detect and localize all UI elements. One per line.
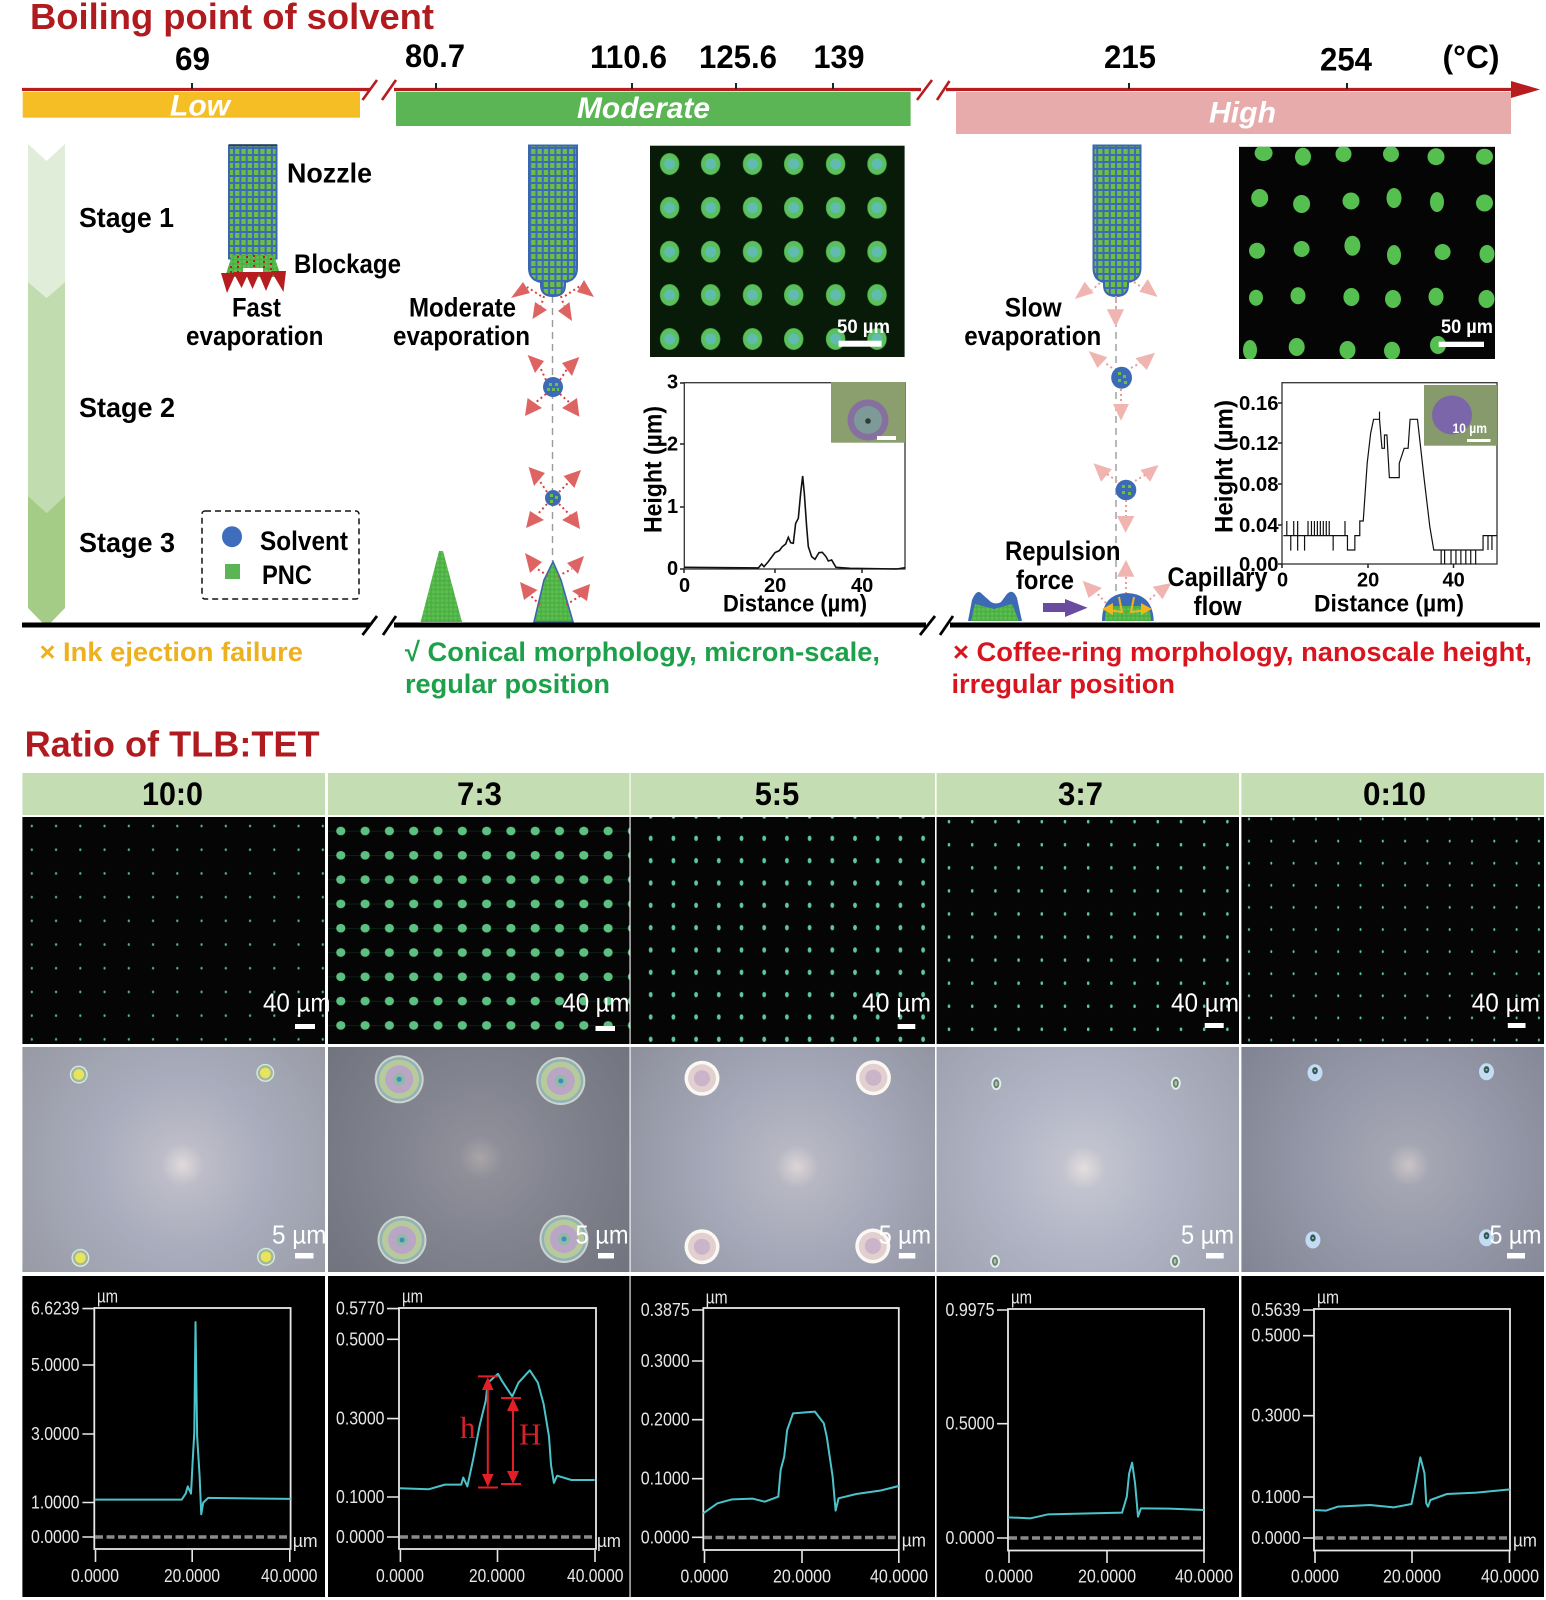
profile chart: 0:10: 0.0000: [1291, 1566, 1339, 1587]
scale labels: 5 µm: 5 µm: [272, 1220, 326, 1250]
nozzle: high: [1094, 146, 1140, 296]
ink ejection: high column: [968, 146, 1171, 621]
inset: optical micrograph: 10 µm: [1452, 421, 1487, 436]
profile chart: 10:0: [22, 1276, 325, 1597]
band: moderate: Moderate: [577, 92, 710, 125]
profile chart: 10:0: µm: [293, 1530, 318, 1551]
labels: nozzle and blockage: Nozzle: [287, 158, 372, 188]
outcome: high: irregular position: [952, 669, 1175, 699]
labels: nozzle and blockage: Fast: [232, 292, 281, 322]
temperature labels: 110.6: [590, 39, 667, 75]
table header: 10:0: [142, 776, 203, 812]
chart: moderate height profile: 1: [667, 496, 678, 518]
band: low: [23, 90, 360, 122]
profile chart: 0:10: 0.1000: [1251, 1486, 1300, 1507]
profile chart: 10:0: µm: [97, 1286, 118, 1306]
scale labels: 40 µm: 40 µm: [1472, 988, 1540, 1018]
labels: nozzle and blockage: [186, 158, 401, 351]
scale labels: 40 µm: [263, 988, 1540, 1031]
profile chart: 10:0: 0.0000: [71, 1565, 119, 1586]
inset: optical micrograph: [1424, 385, 1497, 446]
chart: high height profile: Height (µm): [1210, 400, 1238, 533]
micrograph: high irregular dots: 50 µm: [1441, 317, 1493, 338]
profile chart: 3:7: [937, 1276, 1239, 1597]
stage labels: Stage 3: [79, 527, 175, 558]
annotation: h and H arrows: [460, 1376, 541, 1488]
band: high: [956, 92, 1511, 134]
ink ejection: moderate column: [511, 146, 594, 622]
temperature labels: 254: [1320, 42, 1372, 78]
chart: moderate height profile: 0: [667, 558, 678, 580]
conical deposit: low column: [421, 551, 462, 622]
stage arrows: [28, 144, 65, 627]
scale labels: 40 µm: 40 µm: [562, 988, 629, 1018]
profile chart: 5:5: 0.3875: [641, 1299, 690, 1320]
evaporation arrows: moderate: [511, 280, 594, 601]
chart: high height profile: 40: [1442, 570, 1465, 592]
profile chart: 5:5: 0.0000: [641, 1526, 690, 1547]
outcome: moderate: regular position: [405, 669, 610, 699]
micrograph: moderate dot array: 50 µm: [837, 317, 890, 338]
table header: 5:5: [755, 776, 799, 812]
chart: moderate height profile: [640, 372, 905, 618]
profile chart: 5:5: 0.2000: [641, 1409, 690, 1430]
temperature axis: [22, 38, 1540, 100]
labels: high column: [964, 292, 1268, 621]
profile chart: 0:10: [1241, 1276, 1544, 1597]
temperature labels: (°C): [1442, 39, 1500, 75]
profile chart: 0:10: 0.5000: [1251, 1325, 1300, 1346]
droplets: high: [1111, 367, 1136, 500]
chart: high height profile: 0.00: [1239, 554, 1278, 576]
annotation: h and H arrows: h: [460, 1410, 476, 1445]
profile chart: 0:10: 0.5639: [1251, 1299, 1300, 1320]
labels: high column: Slow: [1005, 292, 1062, 322]
scale labels: 5 µm: [272, 1220, 1542, 1258]
temperature labels: 139: [814, 39, 864, 75]
outcome: low: × Ink ejection failure: [40, 637, 303, 667]
profile chart: 5:5: 0.1000: [641, 1468, 690, 1489]
profile chart: 10:0: 5.0000: [31, 1354, 80, 1375]
stage labels: Stage 1: [79, 202, 174, 233]
profile chart: 0:10: 20.0000: [1383, 1566, 1441, 1587]
profile chart: 7:3: 0.3000: [336, 1408, 384, 1428]
scale labels: 40 µm: 40 µm: [263, 988, 330, 1018]
chart: high height profile: 0.16: [1239, 393, 1278, 415]
chart: moderate height profile: 40: [851, 575, 873, 597]
profile chart: 5:5: 0.0000: [680, 1566, 728, 1587]
profile chart: 10:0: 6.6239: [31, 1298, 80, 1318]
profile chart: 7:3: 20.0000: [469, 1565, 525, 1586]
profile chart: 0:10: 40.0000: [1481, 1566, 1539, 1587]
profile chart: 7:3: µm: [402, 1286, 423, 1306]
profile chart: 10:0: 1.0000: [31, 1492, 80, 1512]
chart: high height profile: 0.12: [1239, 433, 1278, 455]
band: low: Low: [170, 90, 232, 122]
table header: 3:7: [1058, 776, 1103, 812]
scale labels: 5 µm: 5 µm: [879, 1220, 931, 1250]
outcome: high: × Coffee-ring morphology, nanoscale height,: [953, 637, 1532, 667]
labels: high column: evaporation: [964, 321, 1101, 351]
chart: high height profile: 0.04: [1239, 515, 1279, 537]
temperature labels: 80.7: [405, 38, 465, 74]
chart: moderate height profile: Height (µm): [640, 406, 668, 533]
micrograph: high irregular dots: [1239, 145, 1495, 360]
label: moderate evaporation: [393, 292, 530, 351]
chart: high height profile: 0.08: [1239, 474, 1278, 496]
profile chart: 5:5: [631, 1276, 935, 1597]
profile chart: 0:10: 0.0000: [1251, 1527, 1300, 1548]
profile chart: 7:3: µm: [597, 1530, 621, 1551]
label: moderate evaporation: evaporation: [393, 321, 530, 351]
inset: optical micrograph: [831, 382, 905, 443]
labels: nozzle and blockage: evaporation: [186, 321, 324, 351]
chart: moderate height profile: 0: [679, 575, 690, 597]
profile chart: 7:3: 0.1000: [336, 1486, 384, 1507]
scale labels: 5 µm: 5 µm: [576, 1220, 628, 1250]
chart: high height profile: 0: [1277, 570, 1288, 592]
profile chart: 10:0: 40.0000: [261, 1565, 318, 1586]
profile chart: 7:3: 0.5000: [336, 1328, 384, 1350]
deposit fill: coffee ring: [971, 604, 1019, 621]
chart: moderate height profile: 3: [667, 372, 678, 394]
profile chart: 5:5: µm: [706, 1286, 728, 1307]
profile chart: 10:0: 3.0000: [31, 1423, 80, 1444]
temperature labels: [175, 38, 1500, 78]
chart: moderate height profile: Distance (µm): [723, 590, 867, 618]
annotation: h and H arrows: H: [519, 1416, 541, 1452]
profile chart: 7:3: 0.0000: [376, 1565, 424, 1586]
profile chart: 3:7: 0.9975: [946, 1299, 994, 1320]
deposit: dome with capillary flow: [1102, 593, 1154, 621]
profile chart: 0:10: µm: [1513, 1530, 1537, 1551]
profile chart: 7:3: 0.5770: [336, 1298, 384, 1318]
optical micrograph row: [22, 1047, 1544, 1272]
profile chart: 3:7: 40.0000: [1175, 1566, 1233, 1587]
profile chart: 0:10: µm: [1317, 1286, 1339, 1307]
profile chart: 3:7: 0.0000: [985, 1566, 1033, 1587]
labels: high column: Repulsion: [1005, 536, 1120, 566]
stage labels: [79, 202, 175, 558]
profile chart: 5:5: 20.0000: [773, 1566, 831, 1587]
icon: evaporation triangles: [221, 271, 286, 293]
scale labels: 40 µm: 40 µm: [862, 988, 931, 1018]
profile chart: 7:3: [328, 1276, 630, 1597]
profile chart: 5:5: 40.0000: [870, 1566, 928, 1587]
label: moderate evaporation: Moderate: [409, 292, 516, 322]
chart: high height profile: Distance (µm): [1314, 590, 1464, 618]
table header: 0:10: [1363, 776, 1426, 812]
profile chart: 7:3: 0.0000: [336, 1526, 384, 1547]
chart: moderate height profile: 20: [764, 575, 786, 597]
legend: PNC: [262, 560, 312, 590]
profile chart: 3:7: 0.5000: [946, 1413, 994, 1434]
table header: 7:3: [457, 776, 502, 812]
evaporation arrows: high: [1075, 279, 1171, 599]
profile chart: 10:0: 0.0000: [31, 1526, 80, 1547]
profile chart: 0:10: 0.3000: [1251, 1405, 1300, 1426]
labels: high column: force: [1016, 565, 1074, 595]
legend: Solvent: [260, 526, 348, 556]
temperature labels: 215: [1104, 39, 1156, 75]
profile chart: 7:3: 40.0000: [567, 1565, 624, 1586]
labels: nozzle and blockage: Blockage: [294, 249, 401, 279]
profile chart: 5:5: 0.3000: [641, 1350, 690, 1371]
profile chart: 3:7: µm: [1011, 1286, 1032, 1307]
stage labels: Stage 2: [79, 392, 175, 423]
substrate baseline: [22, 616, 1540, 635]
labels: high column: Capillary: [1168, 562, 1268, 592]
profile chart: 3:7: 20.0000: [1078, 1566, 1136, 1587]
profile chart: 5:5: µm: [902, 1530, 926, 1551]
band: high: High: [1209, 96, 1276, 130]
chart: high height profile: 20: [1357, 570, 1379, 592]
legend: [202, 511, 359, 599]
title: ratio of TLB:TET: Ratio of TLB:TET: [25, 724, 320, 764]
fluorescence row: [22, 817, 1544, 1044]
labels: high column: flow: [1194, 591, 1242, 621]
micrograph: moderate dot array: [650, 146, 905, 357]
icon: axis arrowhead: [1511, 81, 1540, 98]
chart: high height profile: [1210, 383, 1497, 618]
outcome: moderate: √ Conical morphology, micron-scale,: [405, 637, 880, 667]
droplets: moderate: [534, 377, 573, 622]
profile chart: 10:0: 20.0000: [164, 1565, 220, 1586]
scale labels: 5 µm: 5 µm: [1181, 1220, 1234, 1250]
band: moderate: [396, 92, 911, 126]
nozzle: low boiling point with blockage: [221, 145, 286, 293]
outcome: moderate: [405, 637, 880, 699]
table header: [22, 773, 1544, 815]
scale labels: 40 µm: 40 µm: [1171, 988, 1239, 1018]
temperature labels: 69: [175, 41, 210, 77]
outcome: high: [952, 637, 1532, 699]
arrow: repulsion direction: [1043, 599, 1088, 617]
deposit: coffee ring: [968, 592, 1022, 621]
temperature labels: 125.6: [699, 39, 777, 75]
nozzle: moderate: [529, 146, 577, 296]
chart: moderate height profile: 2: [667, 434, 678, 456]
profile chart: 3:7: 0.0000: [946, 1527, 994, 1548]
